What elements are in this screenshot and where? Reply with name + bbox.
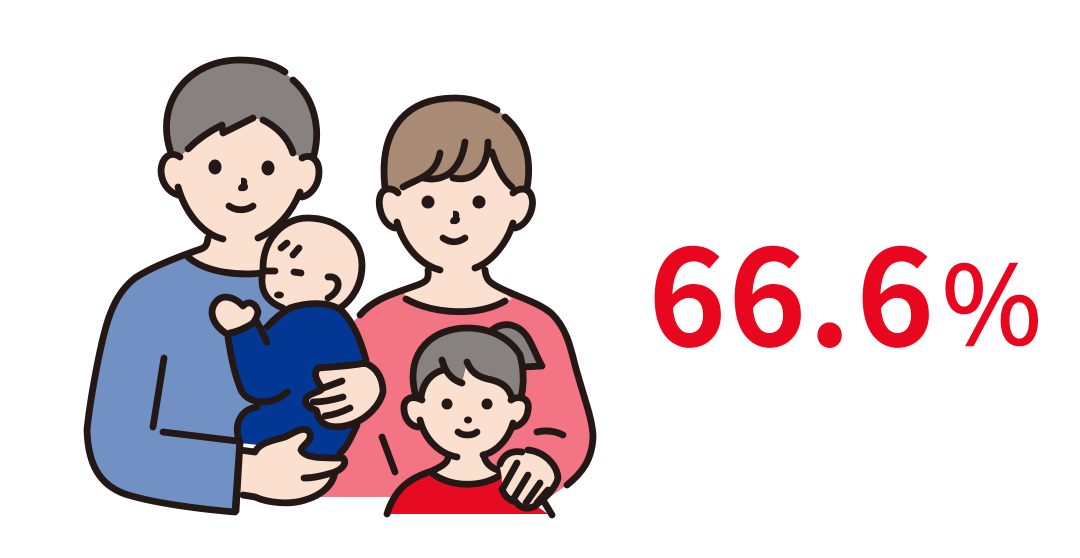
number: 66.6: [648, 193, 934, 385]
statistic: 66.6%: [648, 193, 1041, 385]
father's hands: [236, 363, 383, 511]
girl with ponytail: [387, 325, 558, 515]
baby in navy romper: [212, 218, 366, 459]
percent sign: %: [942, 220, 1041, 376]
family illustration: [87, 60, 593, 515]
father in blue shirt: [87, 60, 320, 512]
woman in pink sweater: [320, 98, 593, 497]
